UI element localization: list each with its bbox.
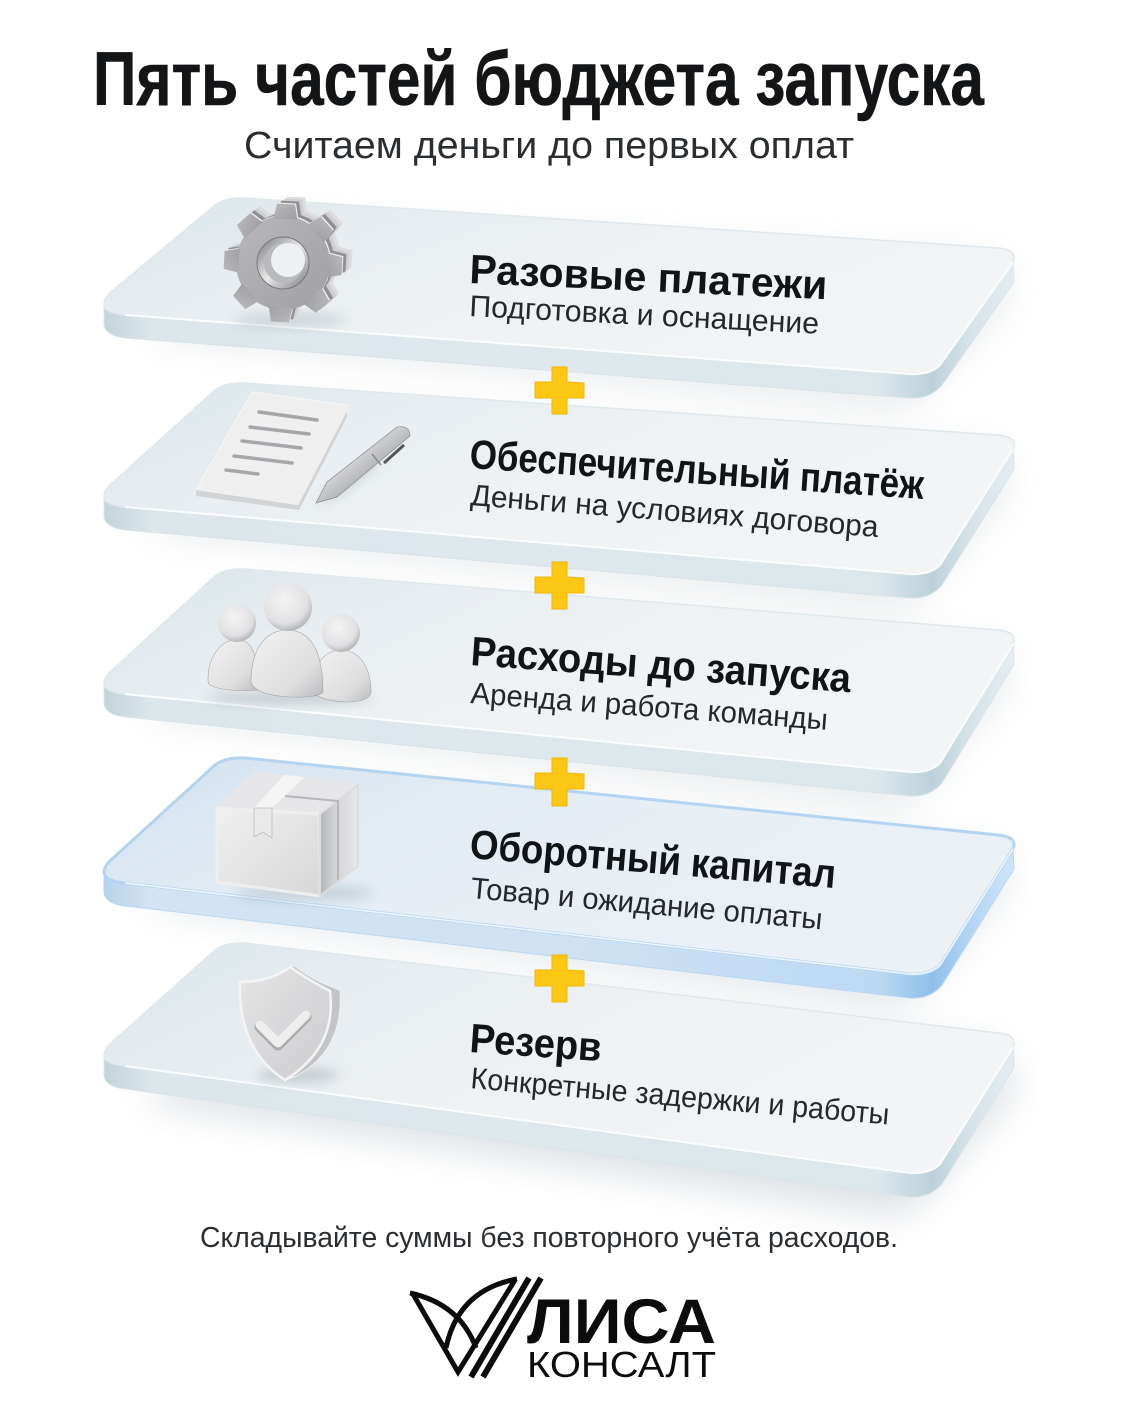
description: Аренда и работа команды xyxy=(469,677,829,737)
subtitle: Считаем деньги до первых оплат xyxy=(244,125,854,167)
logo: Лиса Консалт xyxy=(410,1278,716,1385)
heading: Расходы до запуска xyxy=(469,628,854,701)
logo subline: КОНСАЛТ xyxy=(527,1344,716,1385)
plus sign 4 xyxy=(535,955,584,1002)
heading: Разовые платежи xyxy=(469,246,828,308)
panel: one-time payments xyxy=(104,196,1014,410)
panel: security deposit xyxy=(104,383,1014,610)
icon: document and pen xyxy=(196,392,410,510)
icon: box xyxy=(217,773,375,900)
description: Товар и ожидание оплаты xyxy=(469,872,824,936)
heading: Обеспечительный платёж xyxy=(468,431,926,508)
panel: working capital xyxy=(104,758,1014,1010)
heading: Резерв xyxy=(468,1015,603,1070)
description: Деньги на условиях договора xyxy=(469,479,880,544)
icon: shield with check xyxy=(240,965,340,1082)
panel: pre-launch costs xyxy=(104,569,1014,810)
plus sign 1 xyxy=(535,367,584,414)
icon: gear xyxy=(223,196,353,326)
heading: Оборотный капитал xyxy=(468,821,838,897)
description: Подготовка и оснащение xyxy=(469,290,820,341)
logo wordmark: ЛИСА xyxy=(527,1287,716,1357)
panel: reserve xyxy=(104,943,1015,1215)
plus sign 2 xyxy=(535,562,584,609)
logo mark xyxy=(410,1278,541,1377)
footer note: Складывайте суммы без повторного учёта расходов. xyxy=(200,1222,898,1254)
icon: team xyxy=(206,583,374,704)
description: Конкретные задержки и работы xyxy=(469,1062,891,1132)
plus sign 3 xyxy=(535,758,584,806)
